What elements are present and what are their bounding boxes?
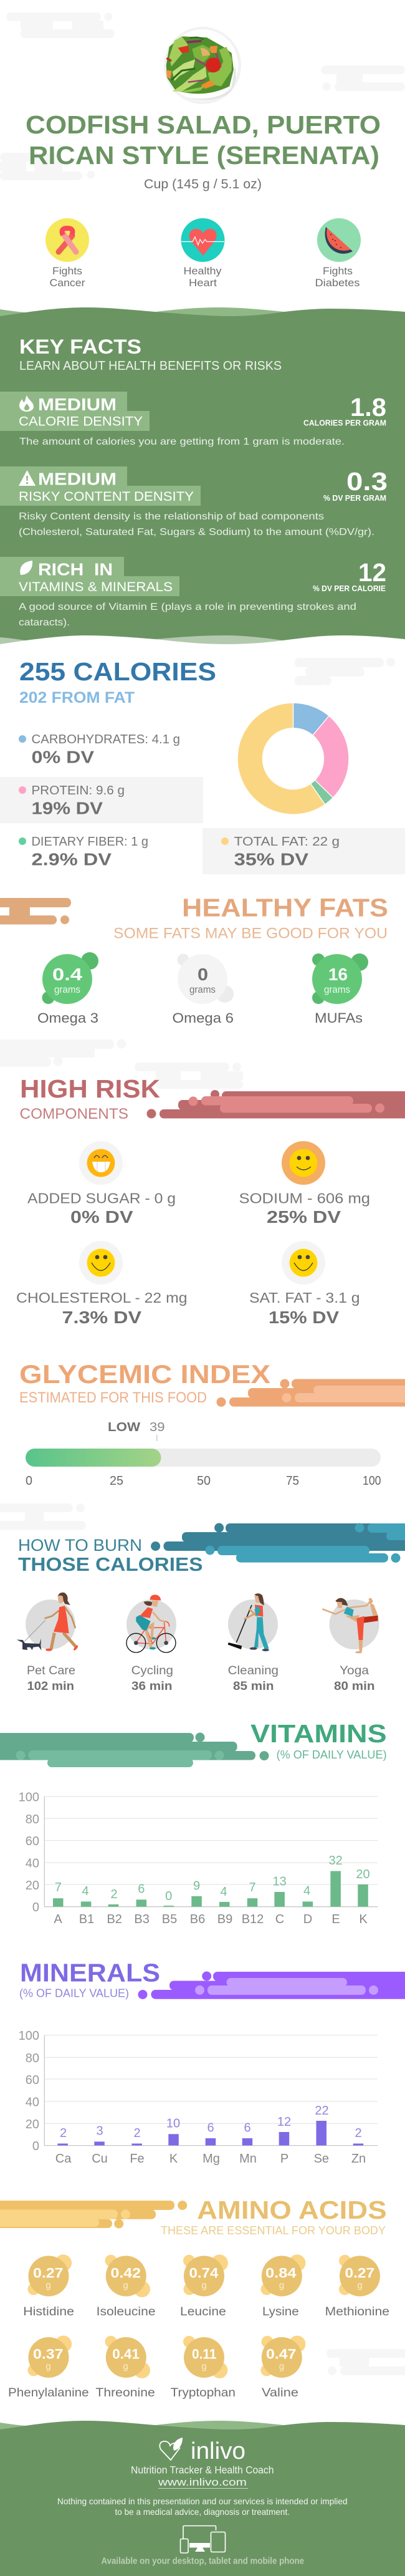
label: cleaning: Cleaning bbox=[228, 1664, 279, 1677]
bar chart: vitamins: B3 bbox=[134, 1913, 150, 1926]
gauge axis labels: 0 bbox=[26, 1474, 32, 1488]
stat: phenylalanine bbox=[8, 2336, 89, 2400]
bar chart: vitamins: B1 bbox=[79, 1913, 94, 1926]
donut chart bbox=[237, 703, 349, 814]
bar chart: minerals: 10 bbox=[166, 2117, 180, 2131]
icon: heart bbox=[181, 218, 224, 262]
panel: glycemic index bbox=[19, 1359, 405, 1488]
stat: lysine: 0.84 bbox=[265, 2265, 297, 2281]
figure: person sweeping bbox=[228, 1593, 269, 1651]
stat: histidine bbox=[23, 2255, 74, 2318]
stat: lysine: Lysine bbox=[262, 2305, 299, 2318]
bar chart: minerals: P bbox=[280, 2152, 288, 2166]
panel: amino acids bbox=[0, 2196, 389, 2400]
fact: calorie density: The amount of calories you are getting from 1 gram is moderate. bbox=[19, 437, 345, 447]
heading: key facts bbox=[19, 335, 282, 373]
heading: amino acids: AMINO ACIDS bbox=[197, 2196, 387, 2224]
activity: cleaning bbox=[228, 1593, 279, 1693]
stat: valine: g bbox=[279, 2361, 284, 2372]
fact: rich in vitamins and minerals bbox=[0, 557, 386, 628]
gauge value: 39 bbox=[150, 1421, 164, 1434]
heading: healthy fats: HEALTHY FATS bbox=[182, 893, 388, 922]
heading: vitamins: VITAMINS bbox=[250, 1719, 387, 1748]
bar chart: minerals: Cu bbox=[92, 2152, 108, 2166]
activity: pet care bbox=[17, 1593, 79, 1693]
legend: dietary fiber: DIETARY FIBER: 1 g bbox=[31, 835, 148, 849]
stat: mufas: 16 bbox=[328, 965, 348, 984]
subheading: essential: THESE ARE ESSENTIAL FOR YOUR BODY bbox=[161, 2224, 386, 2237]
label: yoga bbox=[334, 1664, 375, 1693]
stat: isoleucine bbox=[97, 2255, 156, 2318]
legend: carbohydrates bbox=[19, 733, 180, 767]
legend: protein: 19% DV bbox=[31, 798, 103, 818]
item: sodium: SODIUM - 606 mg bbox=[239, 1190, 370, 1206]
title: RICAN STYLE (SERENATA) bbox=[29, 141, 379, 170]
bar chart: vitamins: 2 bbox=[110, 1888, 118, 1901]
legend band: protein bbox=[0, 777, 203, 823]
stat: threonine: Threonine bbox=[95, 2386, 155, 2400]
icon: salad bowl bbox=[164, 27, 241, 104]
bar chart: vitamins: 0 bbox=[165, 1889, 172, 1903]
stat: omega 3: Omega 3 bbox=[37, 1010, 98, 1026]
logo: inlivo heart bbox=[160, 2438, 245, 2464]
heading: 255 calories: 255 CALORIES bbox=[19, 657, 216, 686]
bar chart: minerals: Zn bbox=[351, 2152, 366, 2166]
bar chart: vitamins: 32 bbox=[328, 1854, 343, 1868]
stat: tryptophan: Tryptophan bbox=[171, 2386, 236, 2400]
heading: how to burn those calories: HOW TO BURN bbox=[18, 1536, 142, 1555]
fact: risky content density: Risky Content density is the relationship of bad components bbox=[19, 511, 324, 522]
stat: isoleucine: Isoleucine bbox=[97, 2305, 156, 2318]
bar chart: vitamins bbox=[19, 1791, 378, 1926]
stat: leucine: g bbox=[201, 2280, 207, 2291]
legend: protein bbox=[19, 784, 125, 818]
label: healthy heart: Heart bbox=[189, 277, 217, 289]
stat: tryptophan: 0.11 bbox=[192, 2346, 217, 2362]
stat: omega 6 bbox=[172, 954, 234, 1026]
bar chart: minerals: 2 bbox=[355, 2126, 362, 2140]
label: cycling: Cycling bbox=[131, 1664, 173, 1677]
bar chart: vitamins: 0 bbox=[32, 1901, 39, 1914]
stat: valine: Valine bbox=[262, 2386, 298, 2400]
tagline: Nutrition Tracker & Health Coach bbox=[131, 2465, 274, 2476]
label: yoga: Yoga bbox=[340, 1664, 369, 1677]
stat: omega 3: grams bbox=[54, 985, 80, 995]
heading: minerals: MINERALS bbox=[20, 1958, 160, 1987]
fact: risky content density: 0.3 bbox=[346, 467, 388, 496]
label: cycling bbox=[131, 1664, 173, 1693]
decoration: minerals swoosh bbox=[138, 1972, 405, 1999]
bar chart: vitamins: D bbox=[303, 1913, 312, 1926]
icon: leaf bbox=[20, 561, 32, 575]
stat: valine: 0.47 bbox=[266, 2346, 297, 2362]
stat: tryptophan: g bbox=[201, 2361, 207, 2372]
heading: how to burn those calories: THOSE CALORIES bbox=[18, 1553, 203, 1575]
panel: how to burn bbox=[17, 1523, 405, 1693]
subtitle: serving size: Cup (145 g / 5.1 oz) bbox=[144, 177, 262, 191]
bar chart: vitamins: 40 bbox=[26, 1857, 39, 1871]
stat: omega 3 bbox=[37, 952, 98, 1026]
label: healthy heart: Healthy bbox=[183, 265, 222, 277]
panel: healthy fats bbox=[0, 893, 388, 1026]
stat: histidine: g bbox=[45, 2280, 51, 2291]
subheading: from fat: 202 FROM FAT bbox=[19, 689, 135, 707]
stat: methionine: g bbox=[357, 2280, 363, 2291]
fact: rich in vitamins and minerals: cataracts). bbox=[19, 617, 70, 628]
gauge bar bbox=[26, 1449, 381, 1467]
bar chart: vitamins: A bbox=[54, 1913, 62, 1926]
legend band: total fat bbox=[202, 828, 405, 874]
figure: woman walking dog bbox=[17, 1593, 79, 1651]
legend: total fat: 35% DV bbox=[234, 849, 308, 869]
bar chart: vitamins: 7 bbox=[55, 1881, 62, 1894]
stat: leucine: 0.74 bbox=[189, 2265, 219, 2281]
bar chart: minerals: 40 bbox=[26, 2095, 39, 2109]
label: cycling: 36 min bbox=[131, 1680, 172, 1693]
legend: total fat: TOTAL FAT: 22 g bbox=[234, 835, 340, 849]
gauge value: LOW bbox=[108, 1421, 140, 1434]
stat: omega 3: 0.4 bbox=[52, 965, 83, 984]
label: yoga: 80 min bbox=[334, 1680, 375, 1693]
label: fights diabetes: Diabetes bbox=[315, 277, 360, 289]
panel: calories bbox=[0, 657, 405, 874]
stat: valine bbox=[260, 2336, 305, 2400]
bar chart: minerals: 6 bbox=[244, 2121, 251, 2135]
bar chart: minerals: 60 bbox=[26, 2073, 39, 2087]
fact: rich in vitamins and minerals: VITAMINS & MINERALS bbox=[19, 580, 173, 594]
decoration: vitamins swoosh bbox=[0, 1732, 269, 1767]
bar chart: vitamins: 7 bbox=[249, 1881, 256, 1894]
bar chart: minerals: 80 bbox=[26, 2052, 39, 2065]
bar chart: vitamins: 4 bbox=[220, 1885, 227, 1899]
label: pet care: 102 min bbox=[27, 1680, 74, 1693]
stat: phenylalanine: Phenylalanine bbox=[8, 2386, 89, 2400]
label: pet care: Pet Care bbox=[27, 1664, 75, 1677]
icon: watermelon bbox=[317, 218, 361, 262]
panel: footer bbox=[0, 2421, 405, 2576]
bar chart: vitamins: C bbox=[275, 1913, 284, 1926]
bar chart: minerals: 22 bbox=[315, 2104, 329, 2118]
gauge axis labels: 100 bbox=[363, 1474, 381, 1488]
fact: calorie density: MEDIUM bbox=[38, 395, 117, 414]
subheading: some fats: SOME FATS MAY BE GOOD FOR YOU bbox=[113, 925, 388, 942]
stat: threonine: 0.41 bbox=[112, 2346, 140, 2362]
bar chart: vitamins: 60 bbox=[26, 1835, 39, 1848]
bar chart: minerals: 20 bbox=[26, 2118, 39, 2131]
stat: tryptophan bbox=[171, 2336, 236, 2400]
subheading: estimated: ESTIMATED FOR THIS FOOD bbox=[19, 1389, 207, 1406]
label: fights cancer: Cancer bbox=[50, 277, 85, 289]
label: fights diabetes: Fights bbox=[323, 265, 353, 277]
heading: glycemic index: GLYCEMIC INDEX bbox=[19, 1359, 270, 1389]
label: fights cancer: Fights bbox=[52, 265, 82, 277]
subheading: components: COMPONENTS bbox=[20, 1106, 128, 1122]
stat: histidine: 0.27 bbox=[33, 2265, 64, 2281]
bar chart: vitamins: B2 bbox=[107, 1913, 122, 1926]
stat: phenylalanine: g bbox=[45, 2361, 51, 2372]
legend: carbohydrates: 0% DV bbox=[31, 747, 94, 767]
stat: omega 6: grams bbox=[189, 985, 216, 995]
panel: vitamins bbox=[0, 1719, 387, 1926]
stat: histidine: Histidine bbox=[23, 2305, 74, 2318]
stat: omega 6: Omega 6 bbox=[172, 1010, 234, 1026]
bar chart: minerals: Se bbox=[314, 2152, 329, 2166]
bar chart: minerals: 2 bbox=[133, 2126, 141, 2140]
bar chart: minerals: 12 bbox=[277, 2115, 291, 2129]
fact: rich in vitamins and minerals: RICH IN bbox=[38, 560, 113, 579]
item: cholesterol: CHOLESTEROL - 22 mg bbox=[16, 1290, 187, 1306]
item: cholesterol: 7.3% DV bbox=[62, 1308, 141, 1327]
legend: dietary fiber: 2.9% DV bbox=[31, 849, 112, 869]
figure: cyclist bbox=[126, 1594, 176, 1652]
bar chart: vitamins: B12 bbox=[242, 1913, 264, 1926]
item: sodium: 25% DV bbox=[267, 1207, 341, 1227]
subheading: percent daily value: (% OF DAILY VALUE) bbox=[277, 1749, 387, 1761]
bar chart: vitamins: 100 bbox=[19, 1791, 39, 1805]
background cloud: calories bbox=[295, 658, 395, 685]
stat: lysine bbox=[260, 2255, 305, 2318]
background cloud: amino bbox=[326, 2349, 405, 2375]
icon: ribbon bbox=[45, 218, 89, 262]
decoration: high risk swoosh bbox=[147, 1090, 405, 1119]
background clouds: high risk bbox=[0, 1039, 243, 1089]
bar chart: minerals: 3 bbox=[96, 2125, 103, 2138]
item: added sugar bbox=[27, 1141, 176, 1227]
stat: lysine: g bbox=[279, 2280, 284, 2291]
legend: dietary fiber bbox=[19, 835, 148, 869]
label: pet care bbox=[27, 1664, 75, 1693]
stat: mufas: grams bbox=[324, 985, 350, 995]
bar chart: vitamins: 4 bbox=[303, 1884, 310, 1898]
fact: rich in vitamins and minerals: % DV PER CALORIE bbox=[313, 584, 386, 593]
decoration: glycemic swoosh bbox=[217, 1379, 405, 1407]
bar chart: minerals: 0 bbox=[32, 2139, 39, 2153]
heading: key facts: KEY FACTS bbox=[19, 335, 141, 358]
figure: yoga pose bbox=[323, 1598, 378, 1653]
logo: inlivo heart: inlivo bbox=[191, 2438, 245, 2464]
fact: risky content density: % DV PER GRAM bbox=[323, 494, 386, 503]
bar chart: minerals: 6 bbox=[207, 2121, 214, 2135]
fact: risky content density bbox=[0, 466, 388, 538]
fact: rich in vitamins and minerals: A good source of Vitamin E (plays a role in preventing strokes and bbox=[19, 602, 356, 612]
fact: risky content density: MEDIUM bbox=[38, 469, 117, 489]
bar chart: vitamins: 13 bbox=[272, 1875, 287, 1889]
label: cleaning bbox=[228, 1664, 279, 1693]
label: cleaning: 85 min bbox=[233, 1680, 274, 1693]
bar chart: minerals: Fe bbox=[130, 2152, 145, 2166]
panel: high risk components bbox=[16, 1074, 405, 1327]
item: saturated fat: SAT. FAT - 3.1 g bbox=[249, 1290, 360, 1306]
stat: phenylalanine: 0.37 bbox=[33, 2346, 64, 2362]
fact: calorie density: CALORIES PER GRAM bbox=[303, 419, 386, 428]
item: saturated fat bbox=[249, 1241, 360, 1327]
disclaimer: to be a medical advice, diagnosis or treatment. bbox=[115, 2507, 290, 2517]
gauge axis labels bbox=[26, 1474, 381, 1488]
bar chart: vitamins: B9 bbox=[217, 1913, 232, 1926]
bar chart: minerals: Mg bbox=[202, 2152, 220, 2166]
title: CODFISH SALAD, PUERTO bbox=[26, 110, 381, 139]
item: saturated fat: 15% DV bbox=[269, 1308, 339, 1327]
stat: methionine: Methionine bbox=[325, 2305, 389, 2318]
heading: high risk: HIGH RISK bbox=[20, 1074, 160, 1103]
gauge axis labels: 75 bbox=[286, 1474, 299, 1488]
activity: cycling bbox=[126, 1594, 176, 1693]
bar chart: vitamins: 6 bbox=[138, 1883, 145, 1896]
panel: health benefits bbox=[45, 218, 361, 289]
bar chart: vitamins: 9 bbox=[193, 1879, 200, 1893]
gauge axis labels: 25 bbox=[110, 1474, 123, 1488]
item: sodium bbox=[239, 1141, 370, 1227]
stat: mufas: MUFAs bbox=[315, 1010, 363, 1026]
icon: devices bbox=[181, 2525, 226, 2553]
item: added sugar: ADDED SUGAR - 0 g bbox=[27, 1190, 176, 1206]
stat: leucine bbox=[180, 2255, 228, 2318]
item: added sugar: 0% DV bbox=[70, 1207, 133, 1227]
fact: risky content density: RISKY CONTENT DENSITY bbox=[19, 490, 194, 504]
stat: omega 6: 0 bbox=[198, 965, 208, 984]
label: healthy heart bbox=[183, 265, 222, 289]
gauge value bbox=[108, 1421, 164, 1441]
bar chart: minerals: 100 bbox=[19, 2029, 39, 2043]
disclaimer bbox=[57, 2496, 348, 2517]
label: fights cancer bbox=[50, 265, 85, 289]
fact: rich in vitamins and minerals: 12 bbox=[358, 558, 386, 587]
stat: leucine: Leucine bbox=[180, 2305, 226, 2318]
fact: calorie density bbox=[0, 392, 386, 447]
stat: mufas bbox=[312, 953, 368, 1026]
stat: methionine bbox=[325, 2255, 389, 2318]
website link: www.inlivo.com bbox=[158, 2476, 247, 2488]
heading: key facts: LEARN ABOUT HEALTH BENEFITS OR RISKS bbox=[19, 359, 282, 373]
bar chart: minerals bbox=[19, 2029, 378, 2166]
bar chart: minerals: 2 bbox=[60, 2126, 67, 2140]
title bbox=[26, 110, 381, 170]
stat: threonine bbox=[95, 2336, 155, 2400]
bar chart: vitamins: 80 bbox=[26, 1813, 39, 1826]
activity: yoga bbox=[323, 1598, 379, 1693]
fact: risky content density: (Cholesterol, Saturated Fat, Sugars & Sodium) to the amount (%DV/gr). bbox=[19, 527, 374, 538]
legend: carbohydrates: CARBOHYDRATES: 4.1 g bbox=[31, 733, 180, 746]
bar chart: vitamins: 20 bbox=[26, 1879, 39, 1893]
decoration: healthy fats swoosh bbox=[0, 898, 71, 924]
bar chart: minerals: Ca bbox=[55, 2152, 72, 2166]
bar chart: minerals: K bbox=[169, 2152, 178, 2166]
bar chart: vitamins: K bbox=[359, 1913, 368, 1926]
item: cholesterol bbox=[16, 1241, 187, 1327]
bar chart: vitamins: E bbox=[331, 1913, 340, 1926]
legend: protein: PROTEIN: 9.6 g bbox=[31, 784, 125, 798]
fact: calorie density: CALORIE DENSITY bbox=[19, 414, 143, 429]
availability note: Available on your desktop, tablet and mobile phone bbox=[101, 2555, 304, 2567]
subheading: percent daily value: (% OF DAILY VALUE) bbox=[19, 1987, 129, 2000]
stat: isoleucine: g bbox=[123, 2280, 128, 2291]
background clouds top bbox=[0, 12, 405, 180]
decoration: burn swoosh bbox=[151, 1523, 405, 1563]
panel: minerals bbox=[19, 1958, 405, 2166]
icon: flame bbox=[19, 395, 34, 412]
icon: warning bbox=[19, 470, 36, 486]
fact: calorie density: 1.8 bbox=[350, 393, 386, 422]
background cloud: burn bbox=[0, 1503, 86, 1530]
bar chart: vitamins: B6 bbox=[190, 1913, 205, 1926]
panel: key facts bbox=[0, 307, 405, 644]
stat: threonine: g bbox=[123, 2361, 128, 2372]
stat: isoleucine: 0.42 bbox=[111, 2265, 141, 2281]
stat: methionine: 0.27 bbox=[345, 2265, 374, 2281]
bar chart: vitamins: B5 bbox=[162, 1913, 177, 1926]
legend: total fat bbox=[221, 835, 340, 869]
disclaimer: Nothing contained in this presentation and our services is intended or implied bbox=[57, 2496, 348, 2506]
heading: how to burn those calories bbox=[18, 1536, 203, 1575]
bar chart: minerals: Mn bbox=[239, 2152, 257, 2166]
bar chart: vitamins: 20 bbox=[356, 1868, 370, 1881]
gauge axis labels: 50 bbox=[197, 1474, 211, 1488]
decoration: amino swoosh bbox=[0, 2201, 187, 2229]
bar chart: vitamins: 4 bbox=[82, 1884, 89, 1898]
label: fights diabetes bbox=[315, 265, 360, 289]
